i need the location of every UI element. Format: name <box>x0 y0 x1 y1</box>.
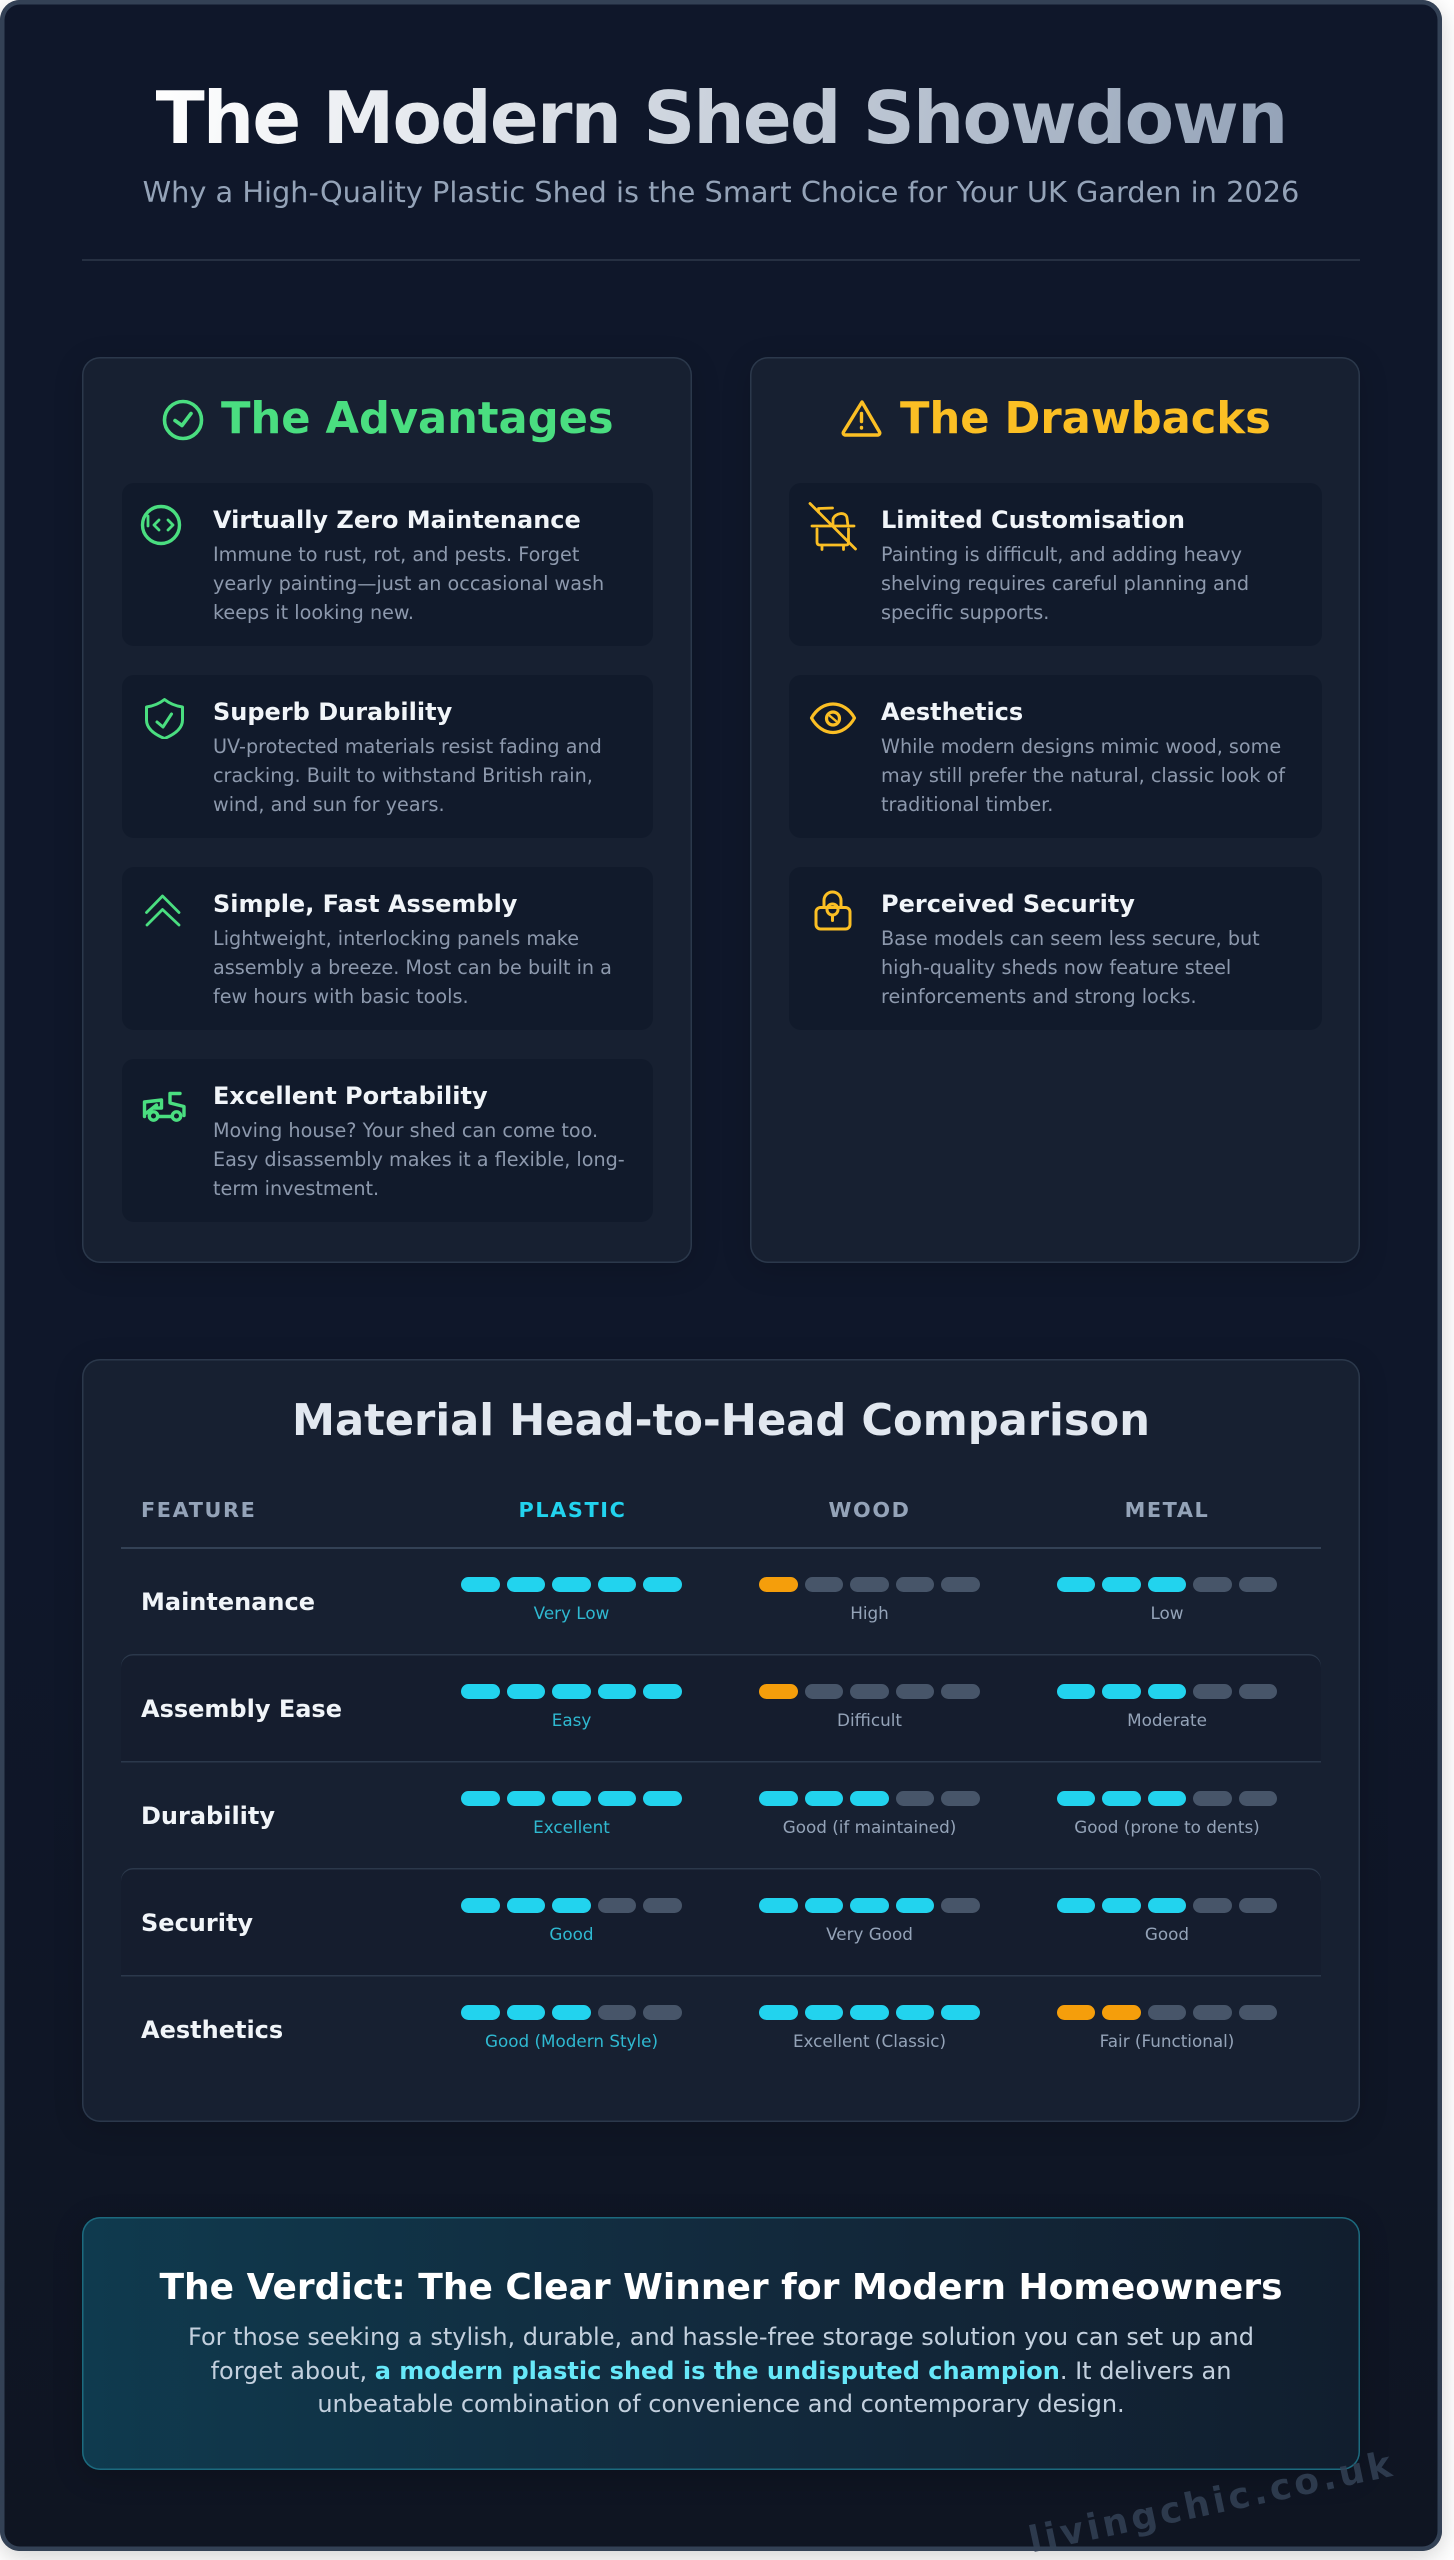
item heading: Superb Durability <box>213 698 452 726</box>
item text: cracking. Built to withstand British rain, <box>213 764 593 787</box>
item text: term investment. <box>213 1177 379 1200</box>
item text <box>213 927 612 1008</box>
item text: Easy disassembly makes it a flexible, long- <box>213 1148 625 1171</box>
icon: crossed out tools <box>808 502 857 551</box>
icon: truck <box>142 1092 186 1122</box>
metal rating <box>1057 1898 1277 1944</box>
card: virtually zero maintenance <box>122 483 653 646</box>
card: perceived security <box>789 867 1322 1030</box>
verdict text: unbeatable combination of convenience and contemporary design. <box>317 2390 1125 2418</box>
wood rating <box>759 2005 980 2051</box>
row: assembly ease <box>121 1654 1321 1761</box>
item text: high-quality sheds now feature steel <box>881 956 1231 979</box>
plastic rating <box>461 2005 682 2051</box>
item heading: Excellent Portability <box>213 1082 488 1110</box>
feature name: Maintenance <box>141 1588 315 1616</box>
metal rating <box>1057 1791 1277 1837</box>
item heading: Virtually Zero Maintenance <box>213 506 581 534</box>
plastic rating: Very Low <box>534 1603 609 1623</box>
column header: plastic: PLASTIC <box>519 1498 626 1522</box>
metal rating: Good (prone to dents) <box>1074 1817 1260 1837</box>
panel: comparison table <box>82 1359 1360 2122</box>
metal rating: Good <box>1145 1924 1189 1944</box>
row: maintenance <box>141 1577 1277 1623</box>
column header: feature: FEATURE <box>141 1498 256 1522</box>
column header: wood: WOOD <box>829 1498 910 1522</box>
wood rating <box>759 1684 980 1730</box>
plastic rating: Excellent <box>533 1817 610 1837</box>
metal rating <box>1057 2005 1277 2051</box>
plastic rating: Easy <box>552 1710 591 1730</box>
card: superb durability <box>122 675 653 838</box>
item text: Base models can seem less secure, but <box>881 927 1260 950</box>
panel: verdict <box>82 2217 1360 2470</box>
plastic rating <box>461 1791 682 1837</box>
card: excellent portability <box>122 1059 653 1222</box>
item heading: Limited Customisation <box>881 506 1185 534</box>
item heading: Perceived Security <box>881 890 1135 918</box>
wood rating: Very Good <box>826 1924 913 1944</box>
item text: keeps it looking new. <box>213 601 414 624</box>
row: durability <box>121 1761 1321 1868</box>
title: The Modern Shed Showdown <box>156 76 1286 160</box>
wood rating <box>759 1577 980 1623</box>
subtitle: Why a High-Quality Plastic Shed is the Smart Choice for Your UK Garden in 2026 <box>143 175 1299 209</box>
feature name: Assembly Ease <box>141 1694 342 1722</box>
feature name: Durability <box>141 1802 275 1830</box>
item heading: Simple, Fast Assembly <box>213 890 517 918</box>
item heading: Aesthetics <box>881 698 1023 726</box>
plastic rating <box>461 1898 682 1944</box>
metal rating: Fair (Functional) <box>1100 2031 1234 2051</box>
heading: the drawbacks: The Drawbacks <box>900 394 1271 444</box>
item text: specific supports. <box>881 601 1049 624</box>
feature name: Security <box>141 1908 253 1936</box>
item text: Moving house? Your shed can come too. <box>213 1119 598 1142</box>
card: aesthetics <box>789 675 1322 838</box>
icon: warning triangle <box>842 400 882 437</box>
wood rating: Difficult <box>837 1710 902 1730</box>
row: aesthetics <box>121 1975 1321 2082</box>
verdict text: forget about, a modern plastic shed is the undisputed champion. It delivers an <box>211 2357 1231 2385</box>
metal rating: Low <box>1150 1603 1184 1623</box>
item text: yearly painting—just an occasional wash <box>213 572 604 595</box>
metal rating <box>1057 1684 1277 1730</box>
wood rating <box>759 1791 980 1837</box>
icon: double chevron <box>145 894 180 926</box>
metal rating: Moderate <box>1127 1710 1207 1730</box>
item text <box>213 1119 625 1200</box>
card: simple fast assembly <box>122 867 653 1030</box>
icon: maintenance <box>140 504 182 546</box>
item text <box>881 735 1286 816</box>
icon: padlock <box>814 890 852 930</box>
metal rating <box>1057 1577 1277 1623</box>
plastic rating <box>461 1684 682 1730</box>
item text: few hours with basic tools. <box>213 985 469 1008</box>
item text: Lightweight, interlocking panels make <box>213 927 579 950</box>
item text: Immune to rust, rot, and pests. Forget <box>213 543 579 566</box>
icon: check circle <box>162 400 204 440</box>
item text <box>881 543 1249 624</box>
panel: advantages <box>82 357 692 1263</box>
feature name: Aesthetics <box>141 2016 283 2044</box>
wood rating: Good (if maintained) <box>783 1817 956 1837</box>
item text: shelving requires careful planning and <box>881 572 1249 595</box>
item text: reinforcements and strong locks. <box>881 985 1197 1008</box>
item text <box>213 543 604 624</box>
icon: shield <box>145 698 184 739</box>
icon: eye <box>810 702 856 734</box>
plastic rating: Good <box>549 1924 594 1944</box>
wood rating <box>759 1898 980 1944</box>
card: limited customisation <box>789 483 1322 646</box>
item text <box>881 927 1260 1008</box>
wood rating: Excellent (Classic) <box>793 2031 946 2051</box>
column header: metal: METAL <box>1125 1498 1209 1522</box>
plastic rating <box>461 1577 682 1623</box>
item text: may still prefer the natural, classic look of <box>881 764 1285 787</box>
item text: assembly a breeze. Most can be built in a <box>213 956 612 979</box>
wood rating: High <box>850 1603 889 1623</box>
verdict text <box>188 2323 1254 2418</box>
item text: traditional timber. <box>881 793 1053 816</box>
heading: the advantages: The Advantages <box>221 394 614 444</box>
heading: comparison: Material Head-to-Head Comparison <box>292 1396 1150 1446</box>
row: security <box>121 1868 1321 1975</box>
item text: Painting is difficult, and adding heavy <box>881 543 1242 566</box>
item text: UV-protected materials resist fading and <box>213 735 602 758</box>
item text: While modern designs mimic wood, some <box>881 735 1281 758</box>
verdict heading: The Verdict: The Clear Winner for Modern Homeowners <box>159 2266 1283 2308</box>
plastic rating: Good (Modern Style) <box>485 2031 658 2051</box>
item text: wind, and sun for years. <box>213 793 445 816</box>
watermark: livingchic.co.uk <box>1025 2444 1399 2560</box>
panel: drawbacks <box>750 357 1360 1263</box>
verdict text: For those seeking a stylish, durable, and hassle-free storage solution you can set up and <box>188 2323 1254 2351</box>
item text <box>213 735 602 816</box>
